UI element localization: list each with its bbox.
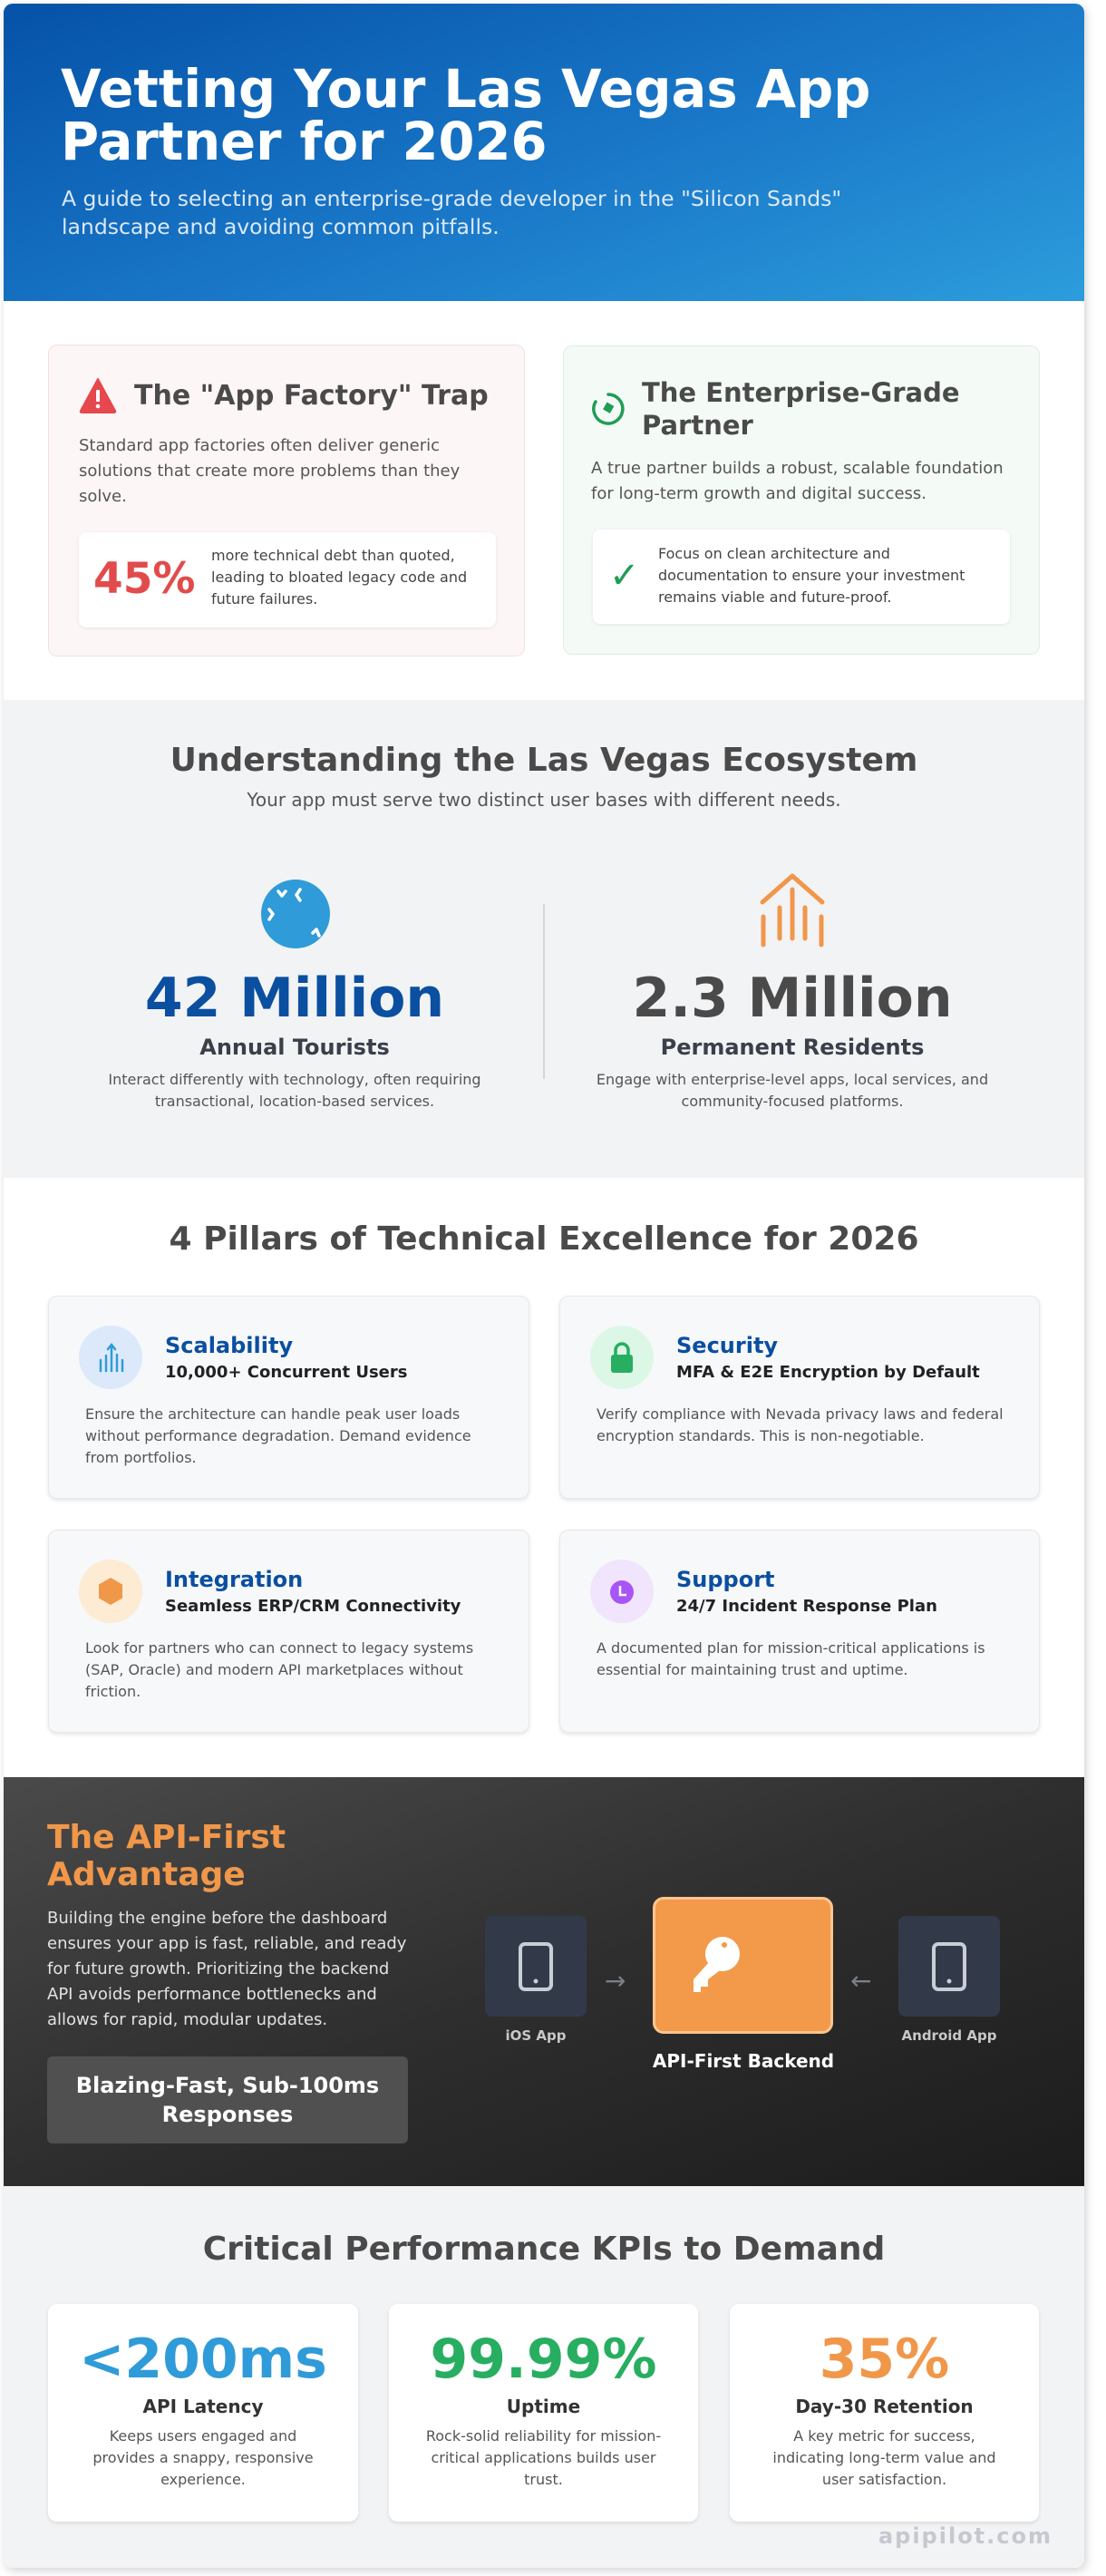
card: support: A documented plan for mission-critical applications is <box>597 1639 985 1657</box>
icon: warning <box>80 378 116 413</box>
icon: green ring <box>592 393 625 425</box>
heading: The "App Factory" Trap <box>134 380 489 412</box>
kpi: retention: Day-30 Retention <box>795 2396 974 2417</box>
text: Standard app factories often deliver generic <box>79 436 440 455</box>
heading: Critical Performance KPIs to Demand <box>203 2231 885 2268</box>
text: solutions that create more problems than they <box>79 462 460 481</box>
card: security: encryption standards. This is non-negotiable. <box>597 1427 925 1444</box>
watermark: apipilot.com <box>878 2523 1053 2549</box>
callout: sub-100ms: Responses <box>162 2102 293 2127</box>
subheading: Your app must serve two distinct user bases with different needs. <box>247 789 841 811</box>
kpi: uptime: Uptime <box>507 2396 580 2417</box>
subtitle: landscape and avoiding common pitfalls. <box>62 214 500 239</box>
heading <box>642 377 960 441</box>
text: ensures your app is fast, reliable, and ready <box>47 1934 406 1953</box>
section: API-first advantage <box>4 1777 1084 2186</box>
card: support: essential for maintaining trust and uptime. <box>597 1661 908 1678</box>
text <box>79 436 460 506</box>
heading: 4 pillars: 4 Pillars of Technical Excellence for 2026 <box>169 1220 919 1258</box>
diagram: iOS App <box>505 2027 566 2044</box>
text: allows for rapid, modular updates. <box>47 2010 327 2029</box>
kpi: latency: <200ms <box>79 2328 327 2391</box>
icon <box>590 1560 654 1623</box>
title: Vetting Your Las Vegas App <box>61 59 870 120</box>
card: integration: (SAP, Oracle) and modern API marketplaces without <box>85 1661 463 1678</box>
stat box: 45% <box>79 532 496 627</box>
card: security: Verify compliance with Nevada privacy laws and federal <box>597 1405 1004 1423</box>
kpi: retention: user satisfaction. <box>822 2471 946 2488</box>
diagram <box>485 1897 1000 2072</box>
stat: tourists: transactional, location-based services. <box>155 1093 434 1110</box>
arrow left: ← <box>850 1966 871 1996</box>
kpi: uptime: critical applications builds user <box>431 2449 656 2466</box>
header banner <box>4 4 1084 301</box>
text: for long-term growth and digital success. <box>591 484 927 503</box>
callout box: ✓ <box>609 555 640 597</box>
title: Partner for 2026 <box>61 112 547 172</box>
stat: residents <box>597 967 988 1110</box>
stat: residents: community-focused platforms. <box>682 1093 903 1110</box>
card: integration <box>48 1530 529 1733</box>
card: security: MFA & E2E Encryption by Default <box>676 1363 980 1382</box>
stat: residents: Permanent Residents <box>661 1035 924 1060</box>
kpi: retention: indicating long-term value and <box>772 2449 996 2466</box>
heading: Advantage <box>47 1856 246 1893</box>
kpi: latency: experience. <box>160 2471 246 2488</box>
title <box>61 59 870 172</box>
callout box <box>593 530 1010 624</box>
heading: Understanding the Las Vegas Ecosystem <box>170 742 917 779</box>
stat: tourists: Interact differently with technology, often requiring <box>108 1071 481 1088</box>
card: security <box>559 1296 1040 1499</box>
node: backend <box>653 1897 833 2034</box>
icon <box>79 1560 142 1623</box>
kpi: retention <box>730 2304 1039 2522</box>
heading: The Enterprise-Grade <box>642 377 960 408</box>
stat: tourists: 42 Million <box>145 967 444 1030</box>
card: security: Security <box>676 1333 778 1358</box>
panel: app factory trap <box>48 345 525 656</box>
text: API avoids performance bottlenecks and <box>47 1985 377 2004</box>
callout box: Focus on clean architecture and <box>658 545 890 562</box>
text <box>47 1909 406 2029</box>
arrow right: → <box>605 1966 626 1996</box>
heading: The API-First <box>47 1819 286 1856</box>
callout: sub-100ms: Blazing-Fast, Sub-100ms <box>76 2073 379 2098</box>
text: for future growth. Prioritizing the backend <box>47 1959 389 1978</box>
stat box: 45%: more technical debt than quoted, <box>211 547 455 564</box>
kpi: uptime: 99.99% <box>431 2328 656 2391</box>
icon <box>79 1326 142 1389</box>
card: integration: Look for partners who can connect to legacy systems <box>85 1639 473 1657</box>
kpi: uptime <box>389 2304 698 2522</box>
stat: residents: 2.3 Million <box>632 967 953 1030</box>
diagram: Android App <box>902 2027 996 2044</box>
callout: sub-100ms <box>47 2056 408 2143</box>
panel: enterprise-grade partner <box>563 345 1040 655</box>
card: integration: Integration <box>165 1567 303 1592</box>
heading: Partner <box>642 410 753 441</box>
kpi: retention: 35% <box>820 2328 949 2391</box>
section: ecosystem <box>4 700 1084 1178</box>
kpi: uptime: trust. <box>524 2471 563 2488</box>
card: scalability <box>48 1296 529 1499</box>
card: integration: Seamless ERP/CRM Connectivity <box>165 1597 461 1616</box>
card: scalability: without performance degradation. Demand evidence <box>85 1427 471 1444</box>
subtitle: A guide to selecting an enterprise-grade developer in the "Silicon Sands" <box>62 186 841 211</box>
card: scalability: Scalability <box>165 1333 293 1358</box>
subtitle <box>62 186 841 239</box>
kpi: uptime: Rock-solid reliability for mission- <box>426 2427 661 2445</box>
card: integration: friction. <box>85 1683 141 1700</box>
stat box: 45%: 45% <box>93 554 196 604</box>
divider <box>543 904 545 1079</box>
stat box: 45%: leading to bloated legacy code and <box>211 569 467 586</box>
heading <box>47 1819 286 1893</box>
kpi: latency: API Latency <box>142 2396 264 2417</box>
text: solve. <box>79 487 127 506</box>
kpi: latency <box>48 2304 358 2522</box>
node: android <box>898 1916 1000 2017</box>
card: support <box>559 1530 1040 1733</box>
text: A true partner builds a robust, scalable foundation <box>591 459 1004 478</box>
card: scalability: 10,000+ Concurrent Users <box>165 1363 407 1382</box>
text: Building the engine before the dashboard <box>47 1909 387 1928</box>
stat box: 45%: future failures. <box>211 590 317 608</box>
card: support: 24/7 Incident Response Plan <box>676 1597 937 1616</box>
card: scalability: Ensure the architecture can handle peak user loads <box>85 1405 460 1423</box>
stat: residents: Engage with enterprise-level apps, local services, and <box>597 1071 988 1088</box>
icon: residents <box>760 873 825 947</box>
callout box: documentation to ensure your investment <box>658 567 965 584</box>
kpi: latency: provides a snappy, responsive <box>92 2449 314 2466</box>
section: KPIs <box>4 2186 1084 2568</box>
icon <box>590 1326 654 1389</box>
stat: tourists: Annual Tourists <box>199 1035 390 1060</box>
callout box: remains viable and future-proof. <box>658 588 891 606</box>
kpi: latency: Keeps users engaged and <box>110 2427 296 2445</box>
stat: tourists <box>108 967 481 1110</box>
icon: globe <box>261 880 330 948</box>
card: scalability: from portfolios. <box>85 1449 197 1466</box>
text <box>591 459 1004 503</box>
kpi: retention: A key metric for success, <box>793 2427 975 2445</box>
diagram: API-First Backend <box>653 2050 834 2072</box>
card: support: Support <box>676 1567 775 1592</box>
node: iOS <box>485 1916 587 2017</box>
